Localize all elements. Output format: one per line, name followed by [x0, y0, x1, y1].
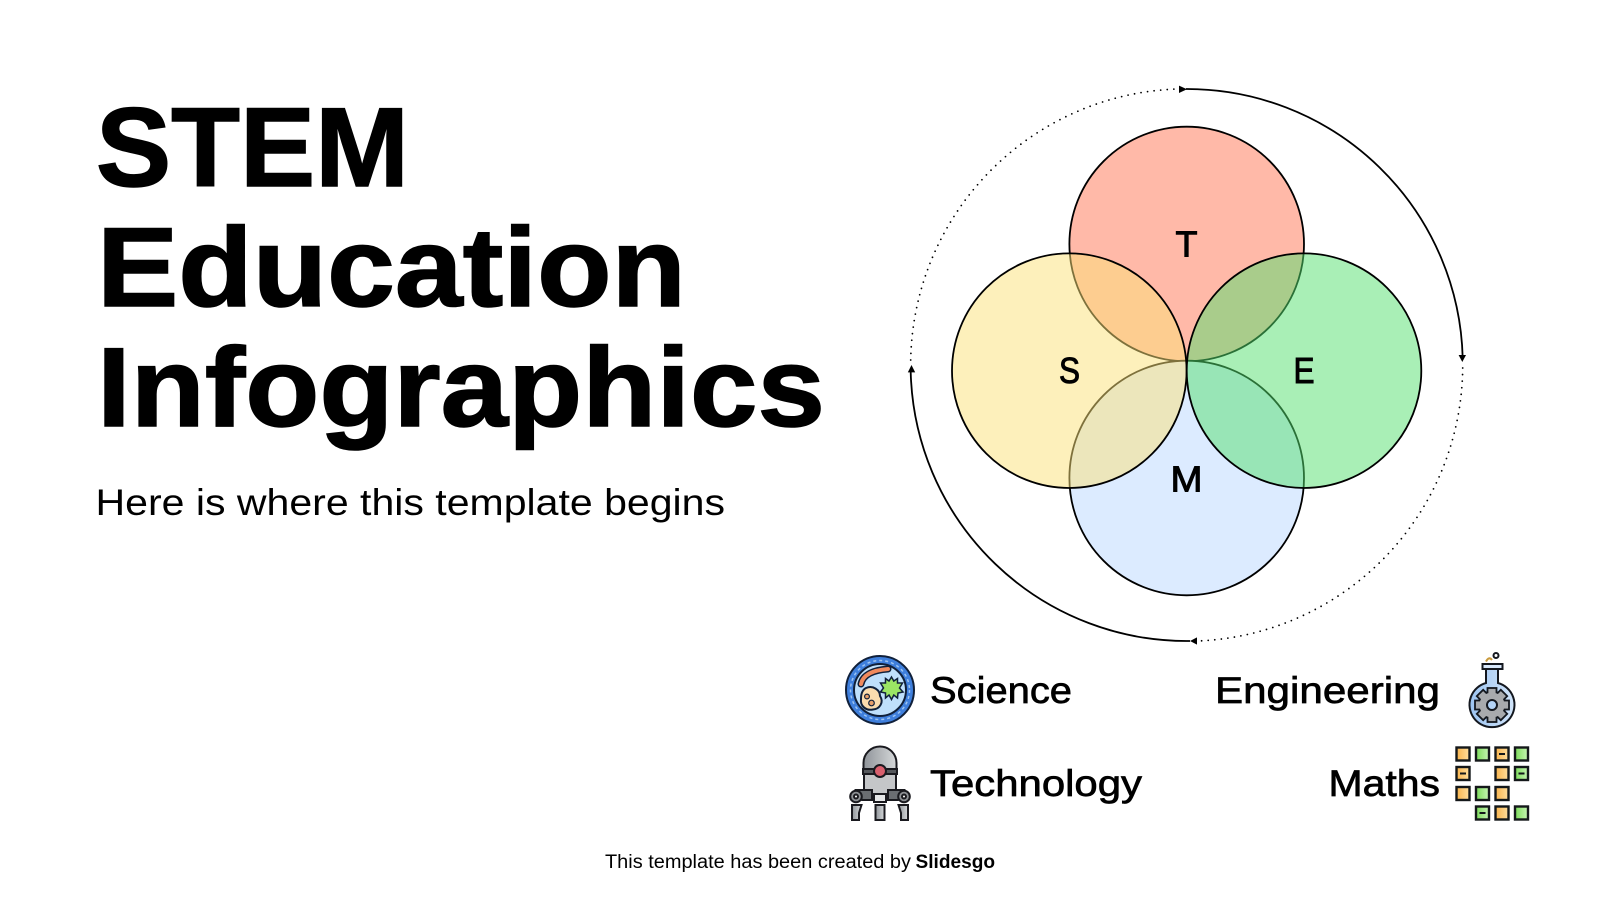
legend: technology: [850, 746, 1142, 820]
footer credit: This template has been created by: [605, 852, 912, 873]
title: Infographics: [97, 325, 825, 450]
circle: engineering: [1187, 253, 1421, 488]
title: Education: [97, 205, 686, 330]
icon: petri dish: [846, 656, 914, 724]
arc: right to bottom, dotted: [1198, 368, 1463, 641]
arc: top to right, solid: [1186, 89, 1463, 358]
arrowhead: bottom: [1190, 637, 1197, 645]
cycle arrows ring: [908, 86, 1466, 645]
venn letters: [1059, 224, 1314, 500]
label: technology: Technology: [930, 762, 1142, 804]
icon: robot: [850, 746, 910, 820]
title: STEM: [96, 85, 409, 210]
footer credit: Slidesgo: [916, 852, 995, 873]
subtitle: Here is where this template begins: [96, 481, 725, 523]
circle: technology: [1069, 127, 1304, 361]
icon: number grid: [1456, 748, 1528, 820]
circle: maths: [1069, 361, 1304, 595]
arrowhead: left: [908, 365, 915, 372]
label: engineering: Engineering: [1215, 669, 1440, 711]
venn letters: E: [1294, 350, 1314, 391]
arc: left to top, dotted: [911, 89, 1178, 360]
venn diagram: [952, 127, 1421, 595]
legend: science: [846, 656, 1072, 724]
title: [96, 85, 825, 450]
icon: flask with gear: [1470, 653, 1514, 727]
label: maths: Maths: [1328, 762, 1440, 804]
arrowhead: right: [1459, 355, 1466, 362]
legend: maths: [1328, 748, 1528, 820]
arc: bottom to left, solid: [911, 372, 1190, 641]
venn letters: T: [1176, 224, 1198, 265]
arrowhead: top: [1179, 86, 1187, 93]
venn letters: M: [1170, 458, 1202, 500]
label: science: Science: [930, 669, 1072, 711]
circle: science: [952, 253, 1187, 488]
venn letters: S: [1059, 350, 1080, 391]
legend: engineering: [1215, 653, 1514, 727]
